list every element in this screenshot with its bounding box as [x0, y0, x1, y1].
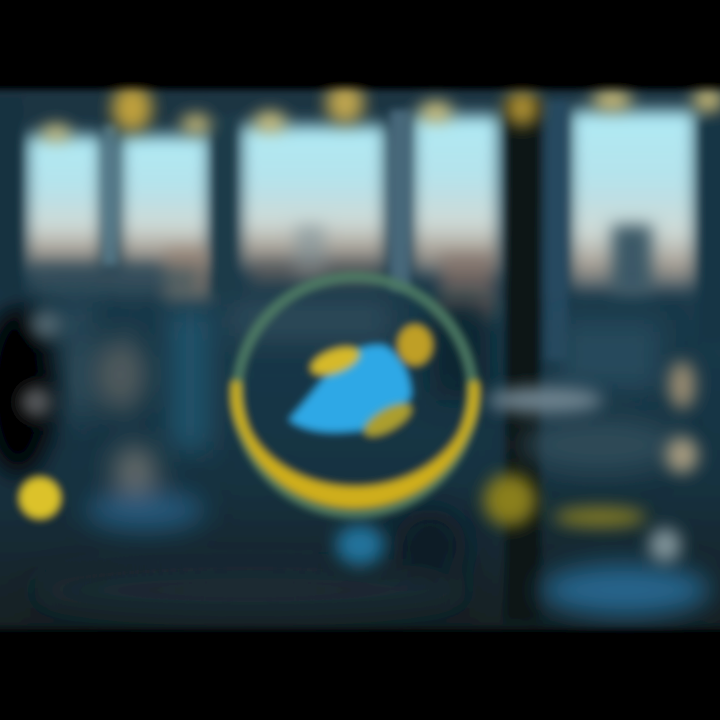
yellow crescent — [236, 385, 474, 504]
outer ring — [237, 277, 473, 513]
olive dot and streak right — [484, 474, 646, 527]
window pillars — [0, 100, 720, 620]
ceiling lights — [41, 82, 720, 141]
skyline silhouettes — [30, 225, 652, 320]
yellow highlights — [306, 324, 433, 443]
blue blob — [288, 344, 412, 433]
city texture — [60, 300, 660, 450]
city base — [0, 90, 720, 630]
yellow dot left — [19, 477, 61, 519]
city lights and dark shapes — [0, 305, 710, 616]
sky windows — [26, 110, 696, 290]
central emblem — [236, 277, 474, 513]
